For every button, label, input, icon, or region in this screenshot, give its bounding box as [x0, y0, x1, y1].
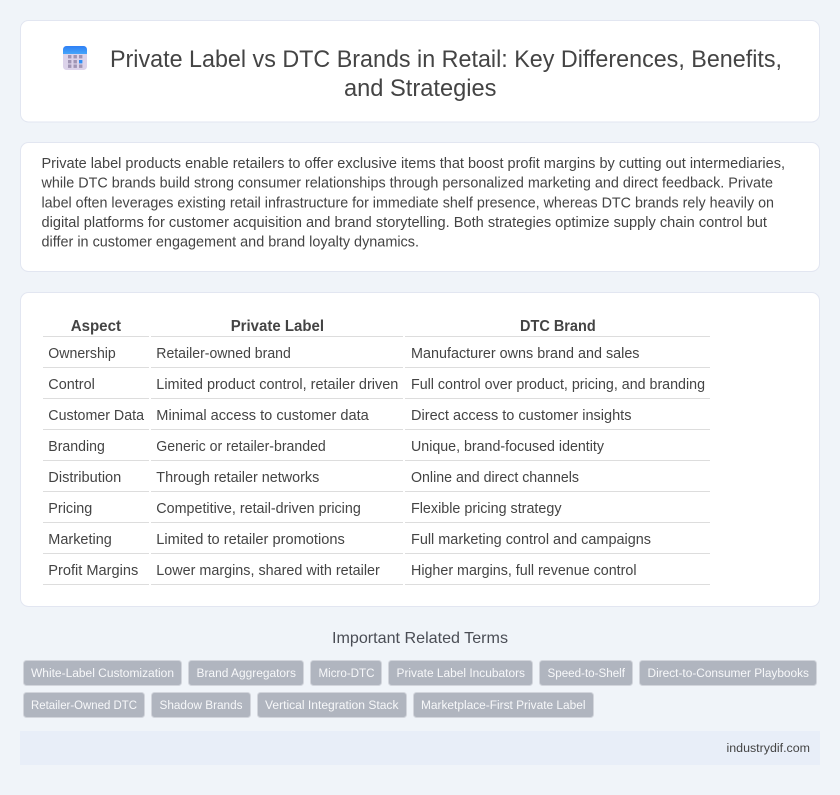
- row: marketing: Marketing: [48, 532, 112, 548]
- row: branding: Branding: [48, 439, 105, 455]
- row: profit margins: [48, 563, 637, 579]
- chip: [24, 692, 144, 718]
- chip: [640, 660, 816, 686]
- row: control: Control: [48, 377, 95, 393]
- chip: White-Label Customization: [31, 666, 174, 680]
- row: branding: Unique, brand-focused identity: [411, 439, 605, 455]
- chip: Vertical Integration Stack: [265, 698, 399, 712]
- chip: Speed-to-Shelf: [548, 666, 626, 680]
- chip: [388, 660, 532, 686]
- row: branding: [48, 439, 605, 455]
- row: marketing: [48, 532, 651, 548]
- title: [110, 46, 782, 102]
- table header: DTC Brand: [520, 318, 596, 335]
- row: pricing: Pricing: [48, 501, 92, 517]
- chip: Brand Aggregators: [196, 666, 296, 680]
- row: distribution: [48, 470, 579, 486]
- panel: comparison table: [20, 292, 820, 606]
- table header: [71, 318, 596, 335]
- row: branding: Generic or retailer-branded: [156, 439, 326, 455]
- row: profit margins: Higher margins, full revenue control: [411, 563, 636, 579]
- table header: Aspect: [71, 318, 122, 335]
- row: pricing: [48, 501, 562, 517]
- footer: industrydif.com: [726, 741, 810, 755]
- panel: header: [20, 20, 820, 122]
- title: and Strategies: [344, 75, 496, 102]
- row: distribution: Through retailer networks: [156, 470, 319, 486]
- row: customer data: Minimal access to customer data: [156, 408, 369, 424]
- chip: [258, 692, 406, 718]
- chip: [414, 692, 594, 718]
- chip: Marketplace-First Private Label: [421, 698, 586, 712]
- row: ownership: Ownership: [48, 346, 116, 362]
- chip: Private Label Incubators: [396, 666, 525, 680]
- row: customer data: Customer Data: [48, 408, 144, 424]
- text block: intro paragraph: while DTC brands build strong consumer relationships through personalized marketing and direct feedback. Private: [40, 176, 773, 192]
- row: ownership: Manufacturer owns brand and sales: [411, 346, 640, 362]
- row: ownership: Retailer-owned brand: [156, 346, 291, 362]
- chip: Micro-DTC: [318, 666, 375, 680]
- table header: Private Label: [231, 318, 324, 335]
- row: control: Full control over product, pricing, and branding: [411, 377, 705, 393]
- row: customer data: [48, 408, 632, 424]
- chips: related terms: [24, 660, 816, 718]
- chip: [152, 692, 250, 718]
- row: distribution: Distribution: [48, 470, 121, 486]
- row: ownership: [48, 346, 640, 362]
- row: pricing: Competitive, retail-driven pricing: [156, 501, 361, 517]
- chip: Shadow Brands: [160, 698, 242, 712]
- text block: intro paragraph: differ in customer engagement and brand loyalty dynamics.: [42, 234, 419, 250]
- icon: calendar: [63, 46, 87, 70]
- heading: related terms: Important Related Terms: [332, 630, 508, 647]
- text block: intro paragraph: label often leverages existing retail infrastructure for immediate shelf presence, whereas DTC brands rely heavily on: [42, 195, 774, 211]
- text block: intro paragraph: digital platforms for customer acquisition and brand storytelling. Both strategies optimize supply chain control but: [42, 215, 767, 231]
- chip: Direct-to-Consumer Playbooks: [648, 666, 809, 680]
- row: marketing: Limited to retailer promotions: [156, 532, 345, 548]
- panel: intro text: [20, 142, 820, 272]
- row: pricing: Flexible pricing strategy: [411, 501, 562, 517]
- row: profit margins: Profit Margins: [48, 563, 138, 579]
- chip: [188, 660, 304, 686]
- row: customer data: Direct access to customer insights: [411, 408, 632, 424]
- footer: [20, 731, 820, 765]
- text block: intro paragraph: Private label products enable retailers to offer exclusive items that boost profit margins by cutting out intermediaries,: [42, 156, 785, 172]
- chip: [310, 660, 382, 686]
- chip: Retailer-Owned DTC: [31, 698, 137, 712]
- chip: [540, 660, 632, 686]
- row: profit margins: Lower margins, shared with retailer: [156, 563, 380, 579]
- row: distribution: Online and direct channels: [411, 470, 579, 486]
- text block: intro paragraph: [40, 156, 785, 250]
- chip: [24, 660, 182, 686]
- row: control: [48, 377, 705, 393]
- row: marketing: Full marketing control and campaigns: [411, 532, 651, 548]
- row: control: Limited product control, retailer driven: [156, 377, 398, 393]
- title: Private Label vs DTC Brands in Retail: Key Differences, Benefits,: [110, 46, 782, 73]
